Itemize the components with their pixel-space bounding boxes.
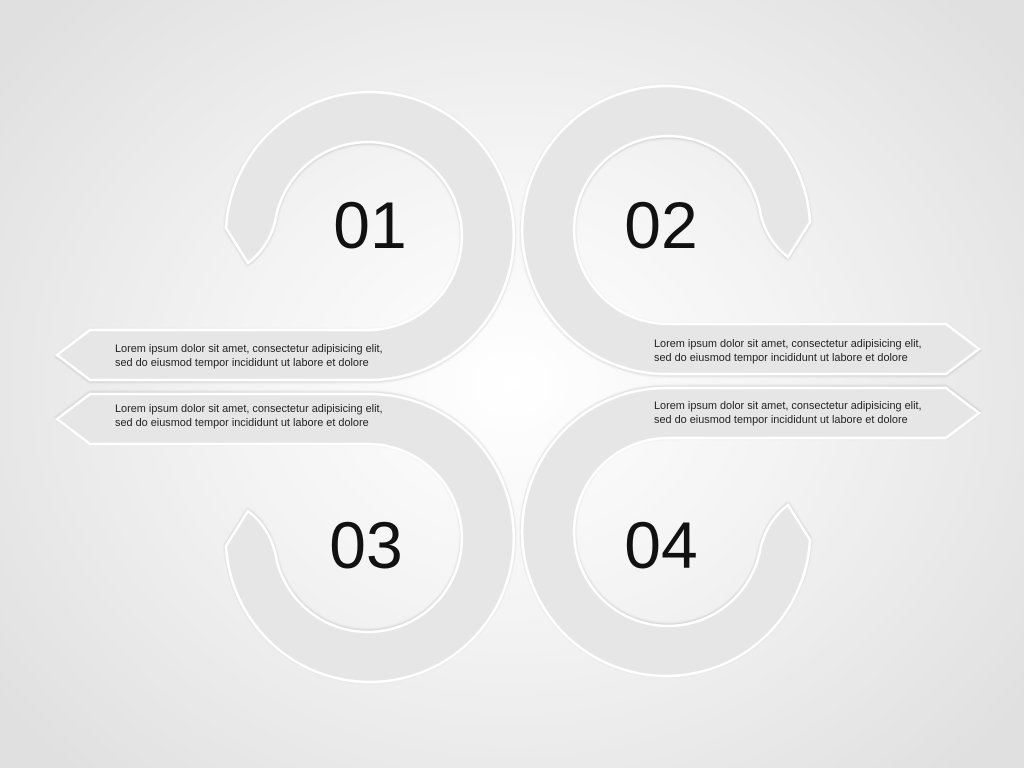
number 02: 02 bbox=[624, 188, 698, 262]
shape 04 bbox=[522, 388, 979, 676]
number 03: 03 bbox=[329, 508, 403, 582]
text 02 bbox=[654, 338, 922, 364]
text 03 bbox=[115, 403, 383, 429]
text 02: sed do eiusmod tempor incididunt ut labore et dolore bbox=[654, 352, 908, 364]
number 01: 01 bbox=[333, 188, 407, 262]
shape 01 bbox=[57, 92, 514, 380]
text 01: sed do eiusmod tempor incididunt ut labore et dolore bbox=[115, 357, 369, 369]
text 03: sed do eiusmod tempor incididunt ut labore et dolore bbox=[115, 417, 369, 429]
text 01: Lorem ipsum dolor sit amet, consectetur adipisicing elit, bbox=[115, 343, 383, 355]
text 02: Lorem ipsum dolor sit amet, consectetur adipisicing elit, bbox=[654, 338, 922, 350]
text 04: sed do eiusmod tempor incididunt ut labore et dolore bbox=[654, 414, 908, 426]
text 01 bbox=[115, 343, 383, 369]
shape 02 bbox=[522, 86, 979, 374]
shape 03 bbox=[57, 394, 514, 682]
text 04: Lorem ipsum dolor sit amet, consectetur adipisicing elit, bbox=[654, 400, 922, 412]
number 04: 04 bbox=[624, 508, 698, 582]
text 04 bbox=[654, 400, 922, 426]
text 03: Lorem ipsum dolor sit amet, consectetur adipisicing elit, bbox=[115, 403, 383, 415]
